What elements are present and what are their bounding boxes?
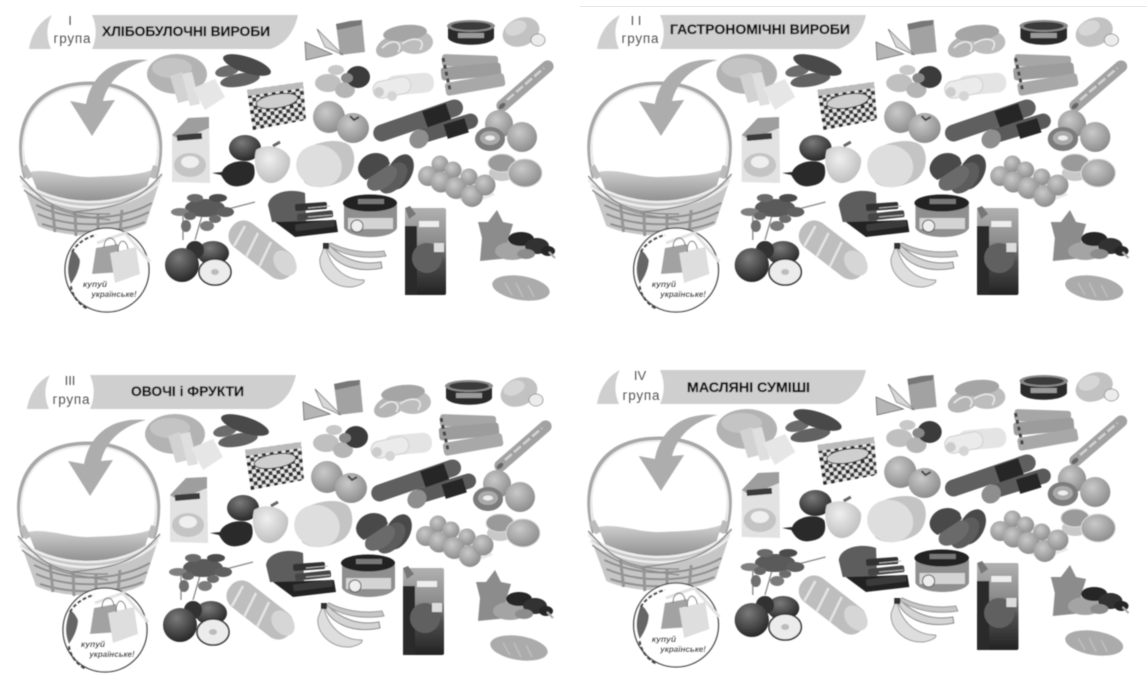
boiled sausage	[221, 575, 299, 645]
cheese	[716, 409, 795, 465]
tomatoes	[884, 456, 941, 498]
apples	[735, 241, 801, 285]
basket	[20, 84, 162, 236]
kiwi	[1048, 110, 1110, 152]
heading banner I: ХЛІБОБУЛОЧНІ ВИРОБИ	[102, 24, 270, 39]
heading banner II	[597, 13, 866, 49]
arrow	[639, 60, 717, 136]
dark bread	[839, 191, 909, 237]
heading banner I	[29, 13, 298, 49]
ham	[861, 493, 926, 549]
heading banner III	[27, 373, 296, 409]
buns	[1061, 509, 1115, 542]
heading banner IV: IV	[634, 368, 646, 383]
meat slices	[930, 505, 992, 554]
fish fillet	[441, 54, 506, 96]
rolls	[943, 427, 1007, 456]
butter pack	[245, 442, 304, 490]
sauce pouch	[405, 206, 446, 295]
cucumbers	[214, 50, 273, 90]
buns	[488, 154, 542, 187]
logo: buy Ukrainian	[65, 228, 150, 312]
kiwi	[1048, 465, 1110, 507]
peppers	[782, 135, 861, 186]
heading banner III: ОВОЧІ і ФРУКТИ	[131, 384, 244, 399]
heading banner III: III	[65, 373, 75, 388]
bananas	[318, 603, 384, 647]
grapes	[476, 570, 553, 621]
sandwich bread	[305, 20, 365, 60]
logo: buy Ukrainian	[63, 588, 148, 672]
meat slices	[358, 150, 420, 199]
logo: buy Ukrainian: українське!	[659, 290, 706, 299]
arrow	[639, 415, 717, 491]
shrimp	[944, 23, 1005, 62]
canned food	[1019, 20, 1068, 45]
jar	[343, 194, 397, 237]
grapes	[1051, 565, 1129, 616]
mayonnaise	[742, 472, 780, 538]
jar	[914, 194, 969, 237]
rolls	[943, 72, 1007, 101]
mayonnaise	[170, 477, 208, 543]
heading banner II: ГАСТРОНОМІЧНІ ВИРОБИ	[670, 22, 850, 37]
sandwich bread	[303, 380, 363, 420]
grapes	[478, 210, 555, 261]
baguette	[494, 58, 556, 114]
heading banner IV	[597, 368, 866, 404]
heading banner I: група	[54, 31, 91, 46]
butter pack	[247, 82, 306, 130]
rolls	[370, 432, 433, 461]
fish fillet	[439, 414, 504, 456]
peppers	[210, 495, 288, 546]
top rule	[580, 6, 1147, 7]
jar	[341, 554, 395, 597]
butter pack	[817, 437, 877, 485]
parsley	[741, 194, 826, 240]
canned food	[445, 380, 493, 405]
foods group I	[20, 12, 556, 312]
arrow	[68, 420, 146, 496]
fish fillet	[1013, 409, 1079, 451]
salami	[943, 452, 1053, 507]
baguette	[492, 418, 554, 474]
sauce pouch	[977, 206, 1018, 295]
peppers	[782, 490, 861, 541]
basket	[588, 84, 732, 236]
ham	[290, 138, 354, 194]
greens	[315, 65, 370, 98]
sauce pouch	[977, 561, 1018, 650]
arrow	[70, 60, 148, 136]
kiwi	[473, 470, 535, 512]
apples	[163, 601, 229, 645]
basket	[588, 439, 732, 591]
eggs	[416, 516, 494, 567]
tomatoes	[313, 101, 369, 143]
shrimp	[370, 383, 431, 422]
bananas	[891, 598, 958, 642]
kiwi	[475, 110, 537, 152]
baguette	[1067, 58, 1130, 114]
boiled sausage	[793, 570, 873, 640]
apples	[165, 241, 231, 285]
logo: buy Ukrainian: українське!	[88, 650, 135, 659]
bun	[1071, 12, 1118, 52]
buns	[486, 514, 540, 547]
cucumbers	[784, 50, 844, 90]
parsley	[741, 549, 826, 595]
rolls	[372, 72, 435, 101]
foods group IV	[588, 367, 1130, 667]
panel: II група — гастрономічні вироби	[588, 12, 1130, 312]
dark bread	[839, 546, 909, 592]
greens	[886, 420, 942, 453]
logo: buy Ukrainian: українське!	[90, 290, 137, 299]
ham	[288, 498, 352, 554]
panel: I група — хлібобулочні вироби	[20, 12, 556, 312]
parsley	[171, 194, 255, 240]
bun	[1071, 367, 1118, 407]
bananas	[891, 243, 958, 287]
panel: IV група — масляні суміші	[588, 367, 1130, 667]
eggs	[418, 156, 496, 207]
cheese	[147, 54, 225, 110]
boiled sausage	[793, 215, 873, 285]
bananas	[320, 243, 386, 287]
basket	[18, 444, 160, 596]
baguette	[1067, 413, 1130, 469]
logo: buy Ukrainian: українське!	[659, 645, 706, 654]
heading banner I: I	[68, 13, 72, 28]
sauce pouch	[403, 566, 444, 655]
cucumbers	[784, 405, 844, 445]
canned food	[1019, 375, 1068, 400]
mayonnaise	[742, 117, 780, 183]
loaf	[1063, 272, 1125, 304]
tomatoes	[311, 461, 367, 503]
sandwich bread	[876, 375, 937, 415]
sandwich bread	[876, 20, 937, 60]
eggs	[990, 510, 1068, 562]
cheese	[145, 414, 223, 470]
cheese	[716, 54, 795, 110]
salami	[369, 457, 478, 512]
parsley	[169, 554, 253, 600]
loaf	[1063, 627, 1125, 659]
meat slices	[930, 150, 992, 199]
logo: buy Ukrainian: купуй	[83, 279, 108, 289]
peppers	[212, 135, 290, 186]
bun	[498, 12, 545, 52]
meat slices	[356, 510, 418, 559]
shrimp	[944, 378, 1005, 417]
foods group II	[588, 12, 1130, 312]
jar	[914, 550, 969, 592]
heading banner III: група	[52, 392, 90, 407]
logo: buy Ukrainian: купуй	[652, 279, 677, 289]
cucumbers	[212, 410, 271, 450]
logo: buy Ukrainian	[634, 228, 720, 312]
logo: buy Ukrainian	[634, 583, 720, 667]
greens	[886, 65, 942, 98]
tomatoes	[884, 101, 941, 143]
bun	[496, 372, 543, 412]
grapes	[1051, 210, 1129, 261]
logo: buy Ukrainian: купуй	[652, 634, 677, 644]
apples	[735, 596, 801, 640]
dark bread	[266, 551, 336, 597]
fish fillet	[1013, 54, 1079, 96]
boiled sausage	[223, 215, 301, 285]
mayonnaise	[172, 117, 210, 183]
heading banner II: I I	[631, 13, 641, 28]
shrimp	[372, 23, 433, 62]
foods group III	[18, 372, 554, 672]
heading banner IV: МАСЛЯНІ СУМІШІ	[687, 380, 810, 395]
eggs	[990, 156, 1068, 207]
loaf	[490, 272, 552, 304]
salami	[371, 97, 480, 152]
canned food	[447, 20, 495, 45]
heading banner II: група	[622, 31, 659, 46]
panel: III група — овочі і фрукти	[18, 372, 554, 672]
butter pack	[817, 82, 877, 130]
buns	[1061, 154, 1115, 187]
logo: buy Ukrainian: купуй	[81, 639, 106, 649]
dark bread	[268, 191, 338, 237]
loaf	[488, 632, 550, 664]
heading banner IV: група	[622, 388, 660, 403]
greens	[313, 425, 368, 458]
ham	[861, 138, 926, 194]
salami	[943, 97, 1053, 152]
